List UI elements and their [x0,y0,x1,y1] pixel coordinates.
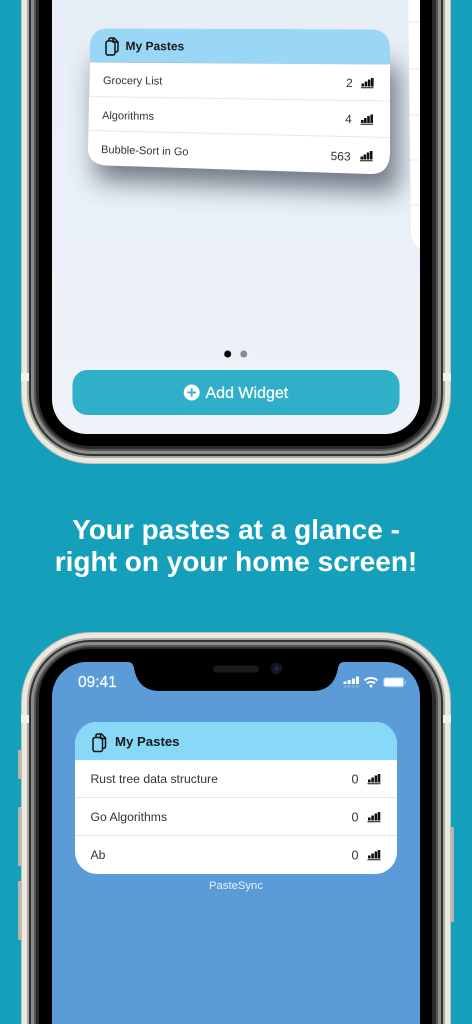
headline [55,514,417,577]
icon: wifi [364,678,378,683]
phone frame bottom [21,632,451,1024]
icon: plus circle [184,384,200,400]
row: Grocery List [103,75,374,90]
icon: wifi dot [370,684,372,688]
bottom phone mockup [18,632,454,1024]
widget shadow [96,60,398,192]
icon: battery [383,677,406,688]
row: Algorithms: 4 [345,112,352,126]
page dots [224,350,247,358]
widget header [75,722,397,760]
top phone mockup [21,0,451,464]
row: Rust tree data structure: Rust tree data structure [90,772,218,786]
neighbouring widget preview, clipped at right [408,0,420,249]
antenna bands [21,715,29,723]
row: Go Algorithms: Go Algorithms [90,810,167,824]
widget: My Pastes flat [75,722,397,874]
widget header [90,28,390,64]
antenna bands [21,373,29,381]
row: Bubble-Sort in Go: 563 [330,149,351,164]
headline: right on your home screen! [55,546,417,577]
row: Bubble-Sort in Go [101,144,373,164]
widget title: My Pastes [115,734,180,749]
status icons [344,676,406,688]
status bar time: 09:41 [78,674,117,691]
row: Algorithms: Algorithms [102,110,155,123]
row: Ab: 0 [352,848,358,862]
side buttons [18,750,454,940]
row: Ab [90,848,380,862]
add widget button: Add Widget [206,385,289,402]
row: Bubble-Sort in Go: Bubble-Sort in Go [101,144,189,158]
row: Grocery List: Grocery List [103,75,162,88]
icon: paste documents [93,734,106,752]
widget body [88,62,390,174]
widget body [75,722,397,874]
screen [52,0,420,434]
widget caption: PasteSync [209,880,263,892]
row: Ab: Ab [90,848,106,862]
screen with notch [52,662,420,1024]
icon: paste documents [106,38,118,55]
icon: cellular signal [344,676,359,688]
row: Go Algorithms [90,810,380,824]
phone frame top [21,0,451,464]
row: Rust tree data structure [90,772,380,786]
row: Algorithms [102,110,373,126]
row: Grocery List: 2 [346,76,353,90]
widget title: My Pastes [125,39,185,53]
add widget button [72,370,400,415]
widget: My Pastes tilted [88,28,390,174]
headline: Your pastes at a glance - [72,514,400,545]
speaker and camera [213,662,282,674]
row: Go Algorithms: 0 [352,810,358,824]
row: Rust tree data structure: 0 [352,772,358,786]
